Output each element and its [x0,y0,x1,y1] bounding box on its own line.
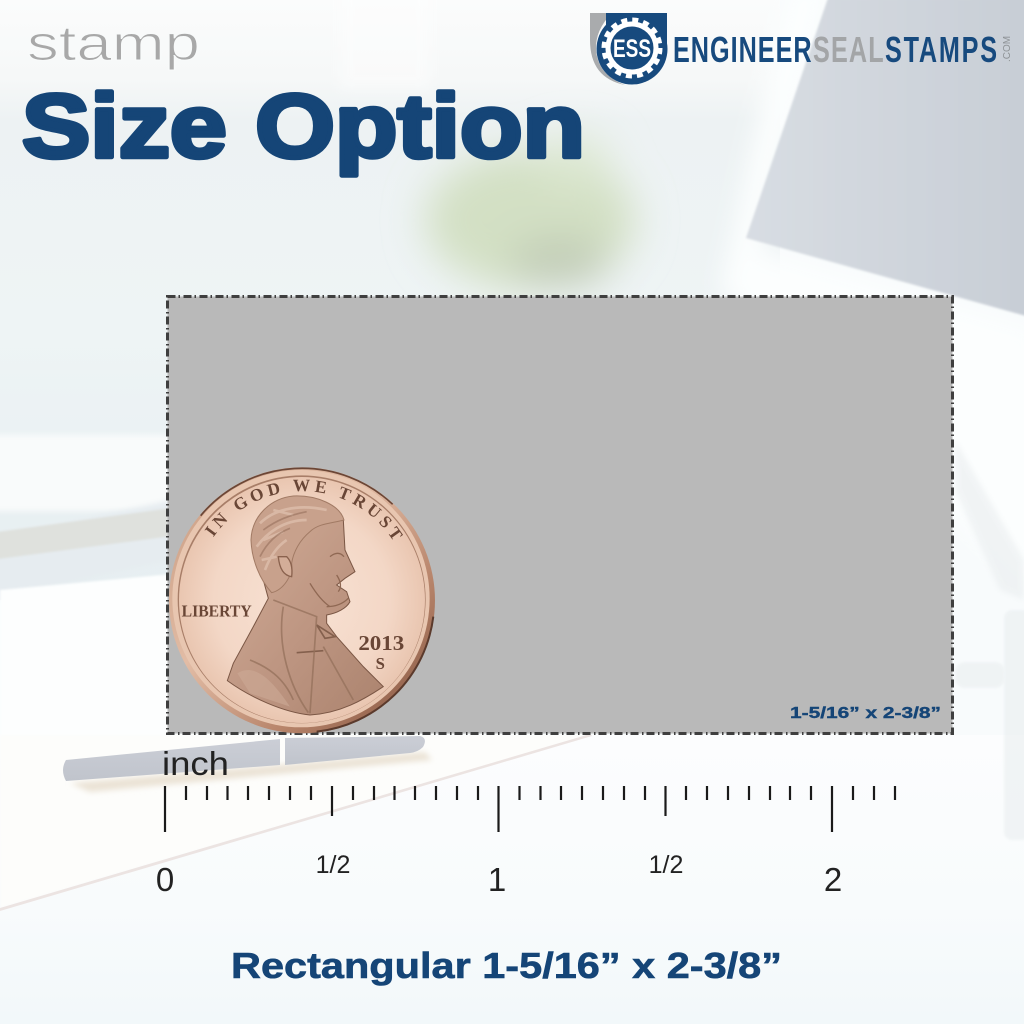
pen shadow [70,752,432,792]
logo: Engineer Seal Stamps [590,13,1013,85]
logo wordmark [673,30,1013,70]
logo wordmark: .COM [1002,36,1013,62]
portrait [227,496,383,715]
coin inscriptions: LIBERTY [182,602,252,621]
size caption: 1-5/16” x 2-3/8” [790,705,941,722]
right side objects [955,440,1024,840]
paper sheet [0,735,590,908]
ruler unit label: inch [162,745,229,782]
ruler numbers: 0 [156,861,174,898]
small heading: stamp: stamp [27,17,200,71]
desk surface [0,574,172,740]
pen [63,736,425,781]
ruler numbers: 1/2 [649,851,683,879]
coin inscriptions: 2013 [358,631,404,655]
coin rim shadows [201,468,393,516]
coin inscriptions: S [376,654,385,673]
plant [425,135,635,290]
coin inscriptions [182,480,404,673]
ruler [156,745,895,898]
main heading: Size Option: Size Option [22,77,585,177]
logo wordmark: SEAL [813,30,884,70]
footer size label: Rectangular 1-5/16” x 2-3/8” [231,945,782,986]
ruler numbers: 2 [824,861,842,898]
hair [251,496,344,593]
logo wordmark: STAMPS [885,30,997,70]
ruler numbers [156,851,842,898]
ruler numbers: 1 [488,861,506,898]
logo wordmark: ENGINEER [673,30,812,70]
penny coin for scale [169,467,435,734]
icon: gear shield [590,13,668,85]
ruler ticks [165,786,895,832]
coin inscriptions: IN GOD WE TRUST [204,480,403,540]
window sill [0,435,172,600]
monitor [720,0,1024,600]
ear and face details [278,557,292,577]
icon: gear shield: ESS [613,35,651,63]
ruler numbers: 1/2 [316,851,350,879]
